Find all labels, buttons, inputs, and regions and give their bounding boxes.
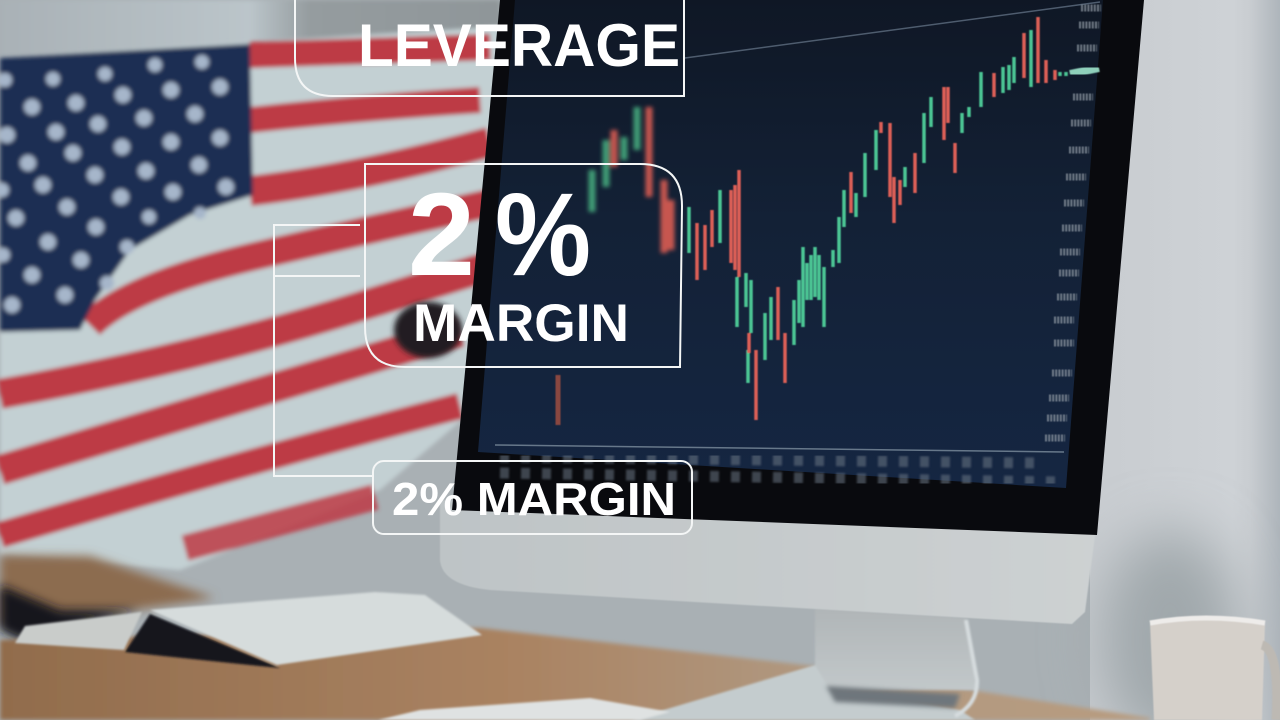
large 2: 2 xyxy=(408,169,475,301)
small margin text: 2% MARGIN xyxy=(392,473,676,525)
mug rim xyxy=(1150,618,1265,623)
time axis line xyxy=(495,445,1064,452)
label box: leverage xyxy=(295,0,684,96)
leverage box outline xyxy=(295,0,684,96)
stand neck xyxy=(815,608,976,690)
blurred brown object xyxy=(0,555,215,625)
dim left candle xyxy=(556,375,560,425)
left page xyxy=(15,612,142,650)
dark blurred spot xyxy=(394,302,462,358)
margin text: MARGIN xyxy=(413,294,629,353)
margin box outline xyxy=(365,164,682,367)
mug body xyxy=(1150,617,1265,720)
monitor screen xyxy=(478,0,1103,488)
mug handle xyxy=(1262,645,1277,720)
label box: 2% margin small xyxy=(373,461,692,534)
stand base shadow xyxy=(826,686,960,708)
monitor xyxy=(440,0,1144,624)
large percent: % xyxy=(495,169,591,301)
wall shadow right xyxy=(1100,530,1240,720)
right end band xyxy=(1070,68,1099,74)
keyboard xyxy=(378,698,670,720)
small box outline xyxy=(373,461,692,534)
wall right xyxy=(1090,0,1280,720)
flag stripes xyxy=(0,47,495,548)
stand edge highlight xyxy=(955,620,977,716)
time axis labels xyxy=(500,457,1060,482)
green candles xyxy=(689,30,1066,383)
notebook xyxy=(15,592,482,668)
monitor bezel xyxy=(452,0,1144,535)
flag canton xyxy=(0,44,253,332)
chart trend line xyxy=(685,2,1100,58)
notebook spine shadow xyxy=(125,614,280,668)
blurred left candles xyxy=(592,107,671,253)
label box: 2% margin large xyxy=(365,164,682,367)
candlesticks xyxy=(558,17,1099,425)
monitor stand xyxy=(630,608,977,720)
desk xyxy=(0,628,1150,720)
bracket connector xyxy=(274,225,373,476)
red candles xyxy=(697,17,1055,420)
american flag xyxy=(0,25,520,570)
right page xyxy=(150,592,482,665)
monitor chin xyxy=(440,500,1097,624)
sharp candles xyxy=(558,17,1066,425)
leverage text: LEVERAGE xyxy=(358,12,680,79)
dark object left edge xyxy=(0,585,140,640)
flag cloth xyxy=(0,25,520,570)
price axis labels xyxy=(1045,8,1101,438)
stand base xyxy=(630,665,975,720)
wall top left xyxy=(0,0,500,70)
coffee mug xyxy=(1150,617,1277,720)
flag stars xyxy=(0,55,234,313)
